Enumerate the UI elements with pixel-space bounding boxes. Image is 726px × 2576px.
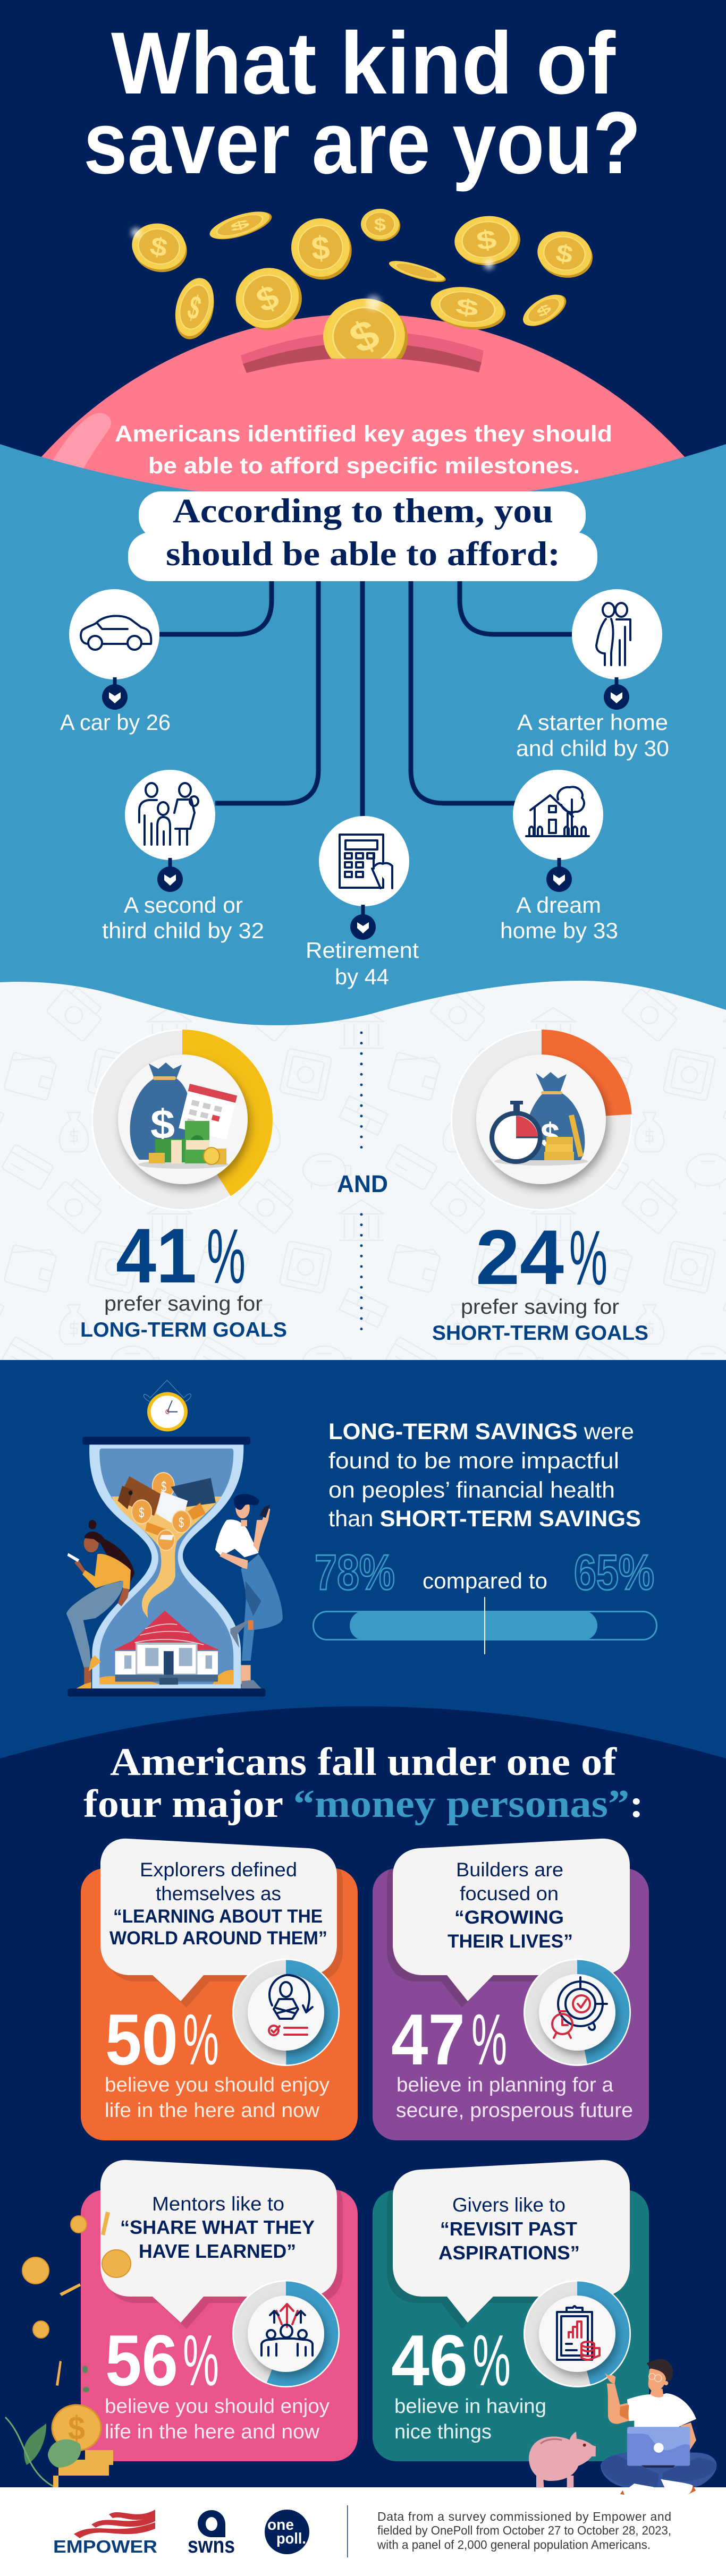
stat: 41% long-term bbox=[80, 1212, 287, 1341]
panel: givers: ASPIRATIONS” bbox=[438, 2242, 580, 2264]
illustration: falling coins and plant: $ bbox=[68, 2410, 85, 2447]
panel: builders: THEIR LIVES” bbox=[448, 1931, 573, 1952]
survey note: with a panel of 2,000 general population Americans. bbox=[377, 2538, 651, 2552]
logo: SWNS bbox=[188, 2510, 235, 2557]
stat: 24% short-term: % bbox=[569, 1214, 607, 1301]
dotted divider bbox=[360, 1033, 362, 1331]
icon: target and alarm clock bbox=[552, 1977, 607, 2038]
panel: givers bbox=[373, 2160, 649, 2461]
subtitle bbox=[115, 421, 612, 479]
heading pill bbox=[128, 491, 597, 581]
heading: money personas bbox=[83, 1740, 644, 1826]
stat: 24% short-term: SHORT-TERM GOALS bbox=[432, 1322, 648, 1345]
panel: light background with faint money icons bbox=[0, 977, 726, 1383]
text block: long-term savings bbox=[328, 1419, 641, 1532]
money pile: $ bbox=[139, 1505, 145, 1521]
text block: long-term savings: on peoples’ financial health bbox=[328, 1477, 615, 1503]
panel: explorers: life in the here and now bbox=[105, 2099, 320, 2122]
logo: OnePoll: poll. bbox=[276, 2530, 306, 2547]
money pile: $ bbox=[161, 1479, 166, 1495]
logo: SWNS: swns bbox=[188, 2532, 235, 2557]
panel: mentors: HAVE LEARNED” bbox=[139, 2240, 296, 2262]
milestone: starter home and child by 30 bbox=[516, 589, 669, 761]
icon: money bag with stopwatch: $ bbox=[541, 1116, 560, 1155]
panel: givers: % bbox=[472, 2320, 511, 2401]
panel: builders: % bbox=[471, 1999, 507, 2080]
text block: long-term savings: LONG-TERM SAVINGS were bbox=[328, 1419, 634, 1444]
gold coins falling into the slot: $ bbox=[374, 215, 386, 234]
panel: explorers bbox=[81, 1839, 358, 2140]
panel: explorers: “LEARNING ABOUT THE bbox=[113, 1906, 323, 1927]
panel: explorers: themselves as bbox=[156, 1883, 281, 1905]
connector lines bbox=[159, 579, 573, 818]
panel: long-term savings section bbox=[0, 1360, 726, 1764]
icon: money bag with calendar and cash bbox=[130, 1062, 237, 1169]
comparison: 78% compared to 65%: 65% bbox=[574, 1544, 654, 1600]
icon: clipboard with chart and coins bbox=[557, 2306, 600, 2360]
subtitle: Americans identified key ages they should bbox=[115, 421, 612, 447]
personas section dark arc bbox=[0, 1706, 726, 1785]
gold coins falling into the slot: $ bbox=[475, 225, 498, 256]
donut chart: 24% short-term goals bbox=[451, 1029, 632, 1211]
milestone: retirement by 44 bbox=[306, 816, 419, 989]
text block: long-term savings: found to be more impactful bbox=[328, 1448, 619, 1474]
stat: 41% long-term: % bbox=[207, 1213, 246, 1299]
survey note: Data from a survey commissioned by Empower and bbox=[377, 2510, 671, 2523]
comparison: 78% compared to 65% bbox=[315, 1544, 654, 1600]
comparison: 78% compared to 65%: compared to bbox=[423, 1568, 547, 1593]
heading pill: According to them, you bbox=[173, 492, 553, 530]
logo: OnePoll: one bbox=[267, 2517, 294, 2534]
stat: 24% short-term: 24 bbox=[476, 1214, 564, 1300]
title bbox=[83, 14, 641, 192]
milestone: car by 26 bbox=[60, 589, 171, 735]
panel: blue milestones background bbox=[0, 444, 726, 1025]
text block: long-term savings: than SHORT-TERM SAVINGS bbox=[328, 1506, 641, 1532]
panel: explorers: WORLD AROUND THEM” bbox=[109, 1928, 327, 1949]
panel: builders bbox=[373, 1839, 649, 2140]
gold coins falling into the slot: $ bbox=[342, 310, 387, 362]
icon: person with checklist bbox=[269, 1975, 313, 2035]
gold coins falling into the slot: $ bbox=[184, 288, 205, 327]
panel: mentors: life in the here and now bbox=[105, 2421, 320, 2443]
panel: givers: nice things bbox=[394, 2421, 492, 2443]
icon: team with arrows bbox=[261, 2304, 313, 2356]
logo: Empower: EMPOWER bbox=[53, 2537, 157, 2556]
panel: explorers: Explorers defined bbox=[140, 1859, 297, 1881]
illustration: falling coins and plant bbox=[5, 2212, 131, 2487]
gold coins falling into the slot bbox=[128, 209, 593, 359]
stat: 24% short-term: prefer saving for bbox=[461, 1296, 619, 1319]
gold coins falling into the slot: $ bbox=[251, 277, 284, 319]
gold coins falling into the slot: $ bbox=[229, 217, 251, 234]
panel: mentors bbox=[81, 2160, 358, 2461]
logo: OnePoll bbox=[265, 2510, 309, 2554]
milestone: dream home by 33 bbox=[500, 770, 618, 943]
milestone: car by 26: A car by 26 bbox=[60, 710, 171, 735]
milestone: retirement by 44: Retirement bbox=[306, 938, 419, 963]
gold coins falling into the slot: $ bbox=[454, 294, 480, 321]
footer divider bbox=[347, 2505, 348, 2557]
heading: money personas: four major “money personas” : bbox=[83, 1782, 644, 1826]
panel: givers: Givers like to bbox=[452, 2194, 565, 2216]
panel: mentors: Mentors like to bbox=[152, 2193, 284, 2215]
panel: givers: 46 bbox=[391, 2320, 468, 2401]
panel: builders: believe in planning for a bbox=[396, 2074, 614, 2096]
panel: mentors: “SHARE WHAT THEY bbox=[120, 2216, 315, 2238]
comparison: 78% compared to 65%: 78% bbox=[315, 1544, 395, 1600]
bar: long-term vs short-term bbox=[314, 1597, 657, 1654]
panel: builders: focused on bbox=[460, 1883, 559, 1905]
heading: money personas: Americans fall under one of bbox=[110, 1740, 617, 1784]
panel: mentors: believe you should enjoy bbox=[105, 2395, 330, 2418]
illustration: hourglass with people and house bbox=[66, 1380, 283, 1697]
survey note bbox=[377, 2510, 671, 2552]
money pile: $ bbox=[179, 1515, 184, 1531]
milestone: second or third child by 32: third child by 32 bbox=[102, 918, 264, 943]
survey note: fielded by OnePoll from October 27 to October 28, 2023, bbox=[377, 2523, 671, 2537]
donut chart: 41% long-term goals bbox=[91, 1029, 273, 1211]
house bbox=[99, 1611, 233, 1685]
icon: money bag with calendar and cash: $ bbox=[150, 1101, 175, 1147]
panel: builders: secure, prosperous future bbox=[396, 2099, 633, 2122]
icon: money bag with stopwatch bbox=[489, 1072, 588, 1166]
panel: builders: Builders are bbox=[456, 1859, 563, 1881]
milestone: dream home by 33: A dream bbox=[516, 892, 601, 917]
milestone: retirement by 44: by 44 bbox=[335, 964, 389, 989]
panel: builders: “GROWING bbox=[454, 1907, 564, 1928]
stat: 41% long-term: LONG-TERM GOALS bbox=[80, 1319, 287, 1341]
panel: mentors: 56 bbox=[105, 2320, 178, 2401]
footer background bbox=[0, 2487, 726, 2576]
milestone: starter home and child by 30: A starter home bbox=[517, 710, 668, 735]
panel: explorers: believe you should enjoy bbox=[105, 2074, 330, 2096]
gold coins falling into the slot: $ bbox=[554, 239, 575, 269]
subtitle: be able to afford specific milestones. bbox=[148, 453, 580, 479]
stat: 41% long-term: prefer saving for bbox=[104, 1293, 263, 1315]
gold coins falling into the slot: $ bbox=[148, 232, 170, 263]
panel: givers: believe in having bbox=[394, 2395, 546, 2418]
milestone: second or third child by 32 bbox=[102, 770, 264, 943]
title: saver are you? bbox=[83, 94, 641, 192]
gold coins falling into the slot: $ bbox=[310, 229, 331, 267]
stat: 24% short-term bbox=[432, 1214, 648, 1345]
woman with phone bbox=[66, 1520, 134, 1688]
title: What kind of bbox=[111, 14, 616, 113]
gold coins falling into the slot: $ bbox=[534, 301, 554, 320]
panel: givers: “REVISIT PAST bbox=[440, 2218, 577, 2240]
stat: 41% long-term: 41 bbox=[116, 1212, 197, 1299]
icon: wall clock bbox=[143, 1380, 191, 1431]
milestone: starter home and child by 30: and child by 30 bbox=[516, 736, 669, 761]
AND label: AND bbox=[337, 1170, 388, 1197]
panel: explorers: 50 bbox=[105, 1999, 178, 2080]
man with phone bbox=[215, 1494, 283, 1688]
panel: explorers: % bbox=[183, 1999, 219, 2080]
money pile bbox=[118, 1473, 216, 1551]
milestone: dream home by 33: home by 33 bbox=[500, 918, 618, 943]
panel: builders: 47 bbox=[391, 1999, 465, 2080]
illustration: piggy bank bbox=[529, 2432, 596, 2488]
illustration: man with laptop bbox=[601, 2359, 716, 2495]
panel: mentors: % bbox=[183, 2320, 219, 2401]
milestone: second or third child by 32: A second or bbox=[124, 892, 243, 917]
heading pill: should be able to afford: bbox=[166, 535, 560, 573]
logo: Empower bbox=[53, 2510, 157, 2556]
piggy bank body bbox=[0, 314, 726, 1180]
